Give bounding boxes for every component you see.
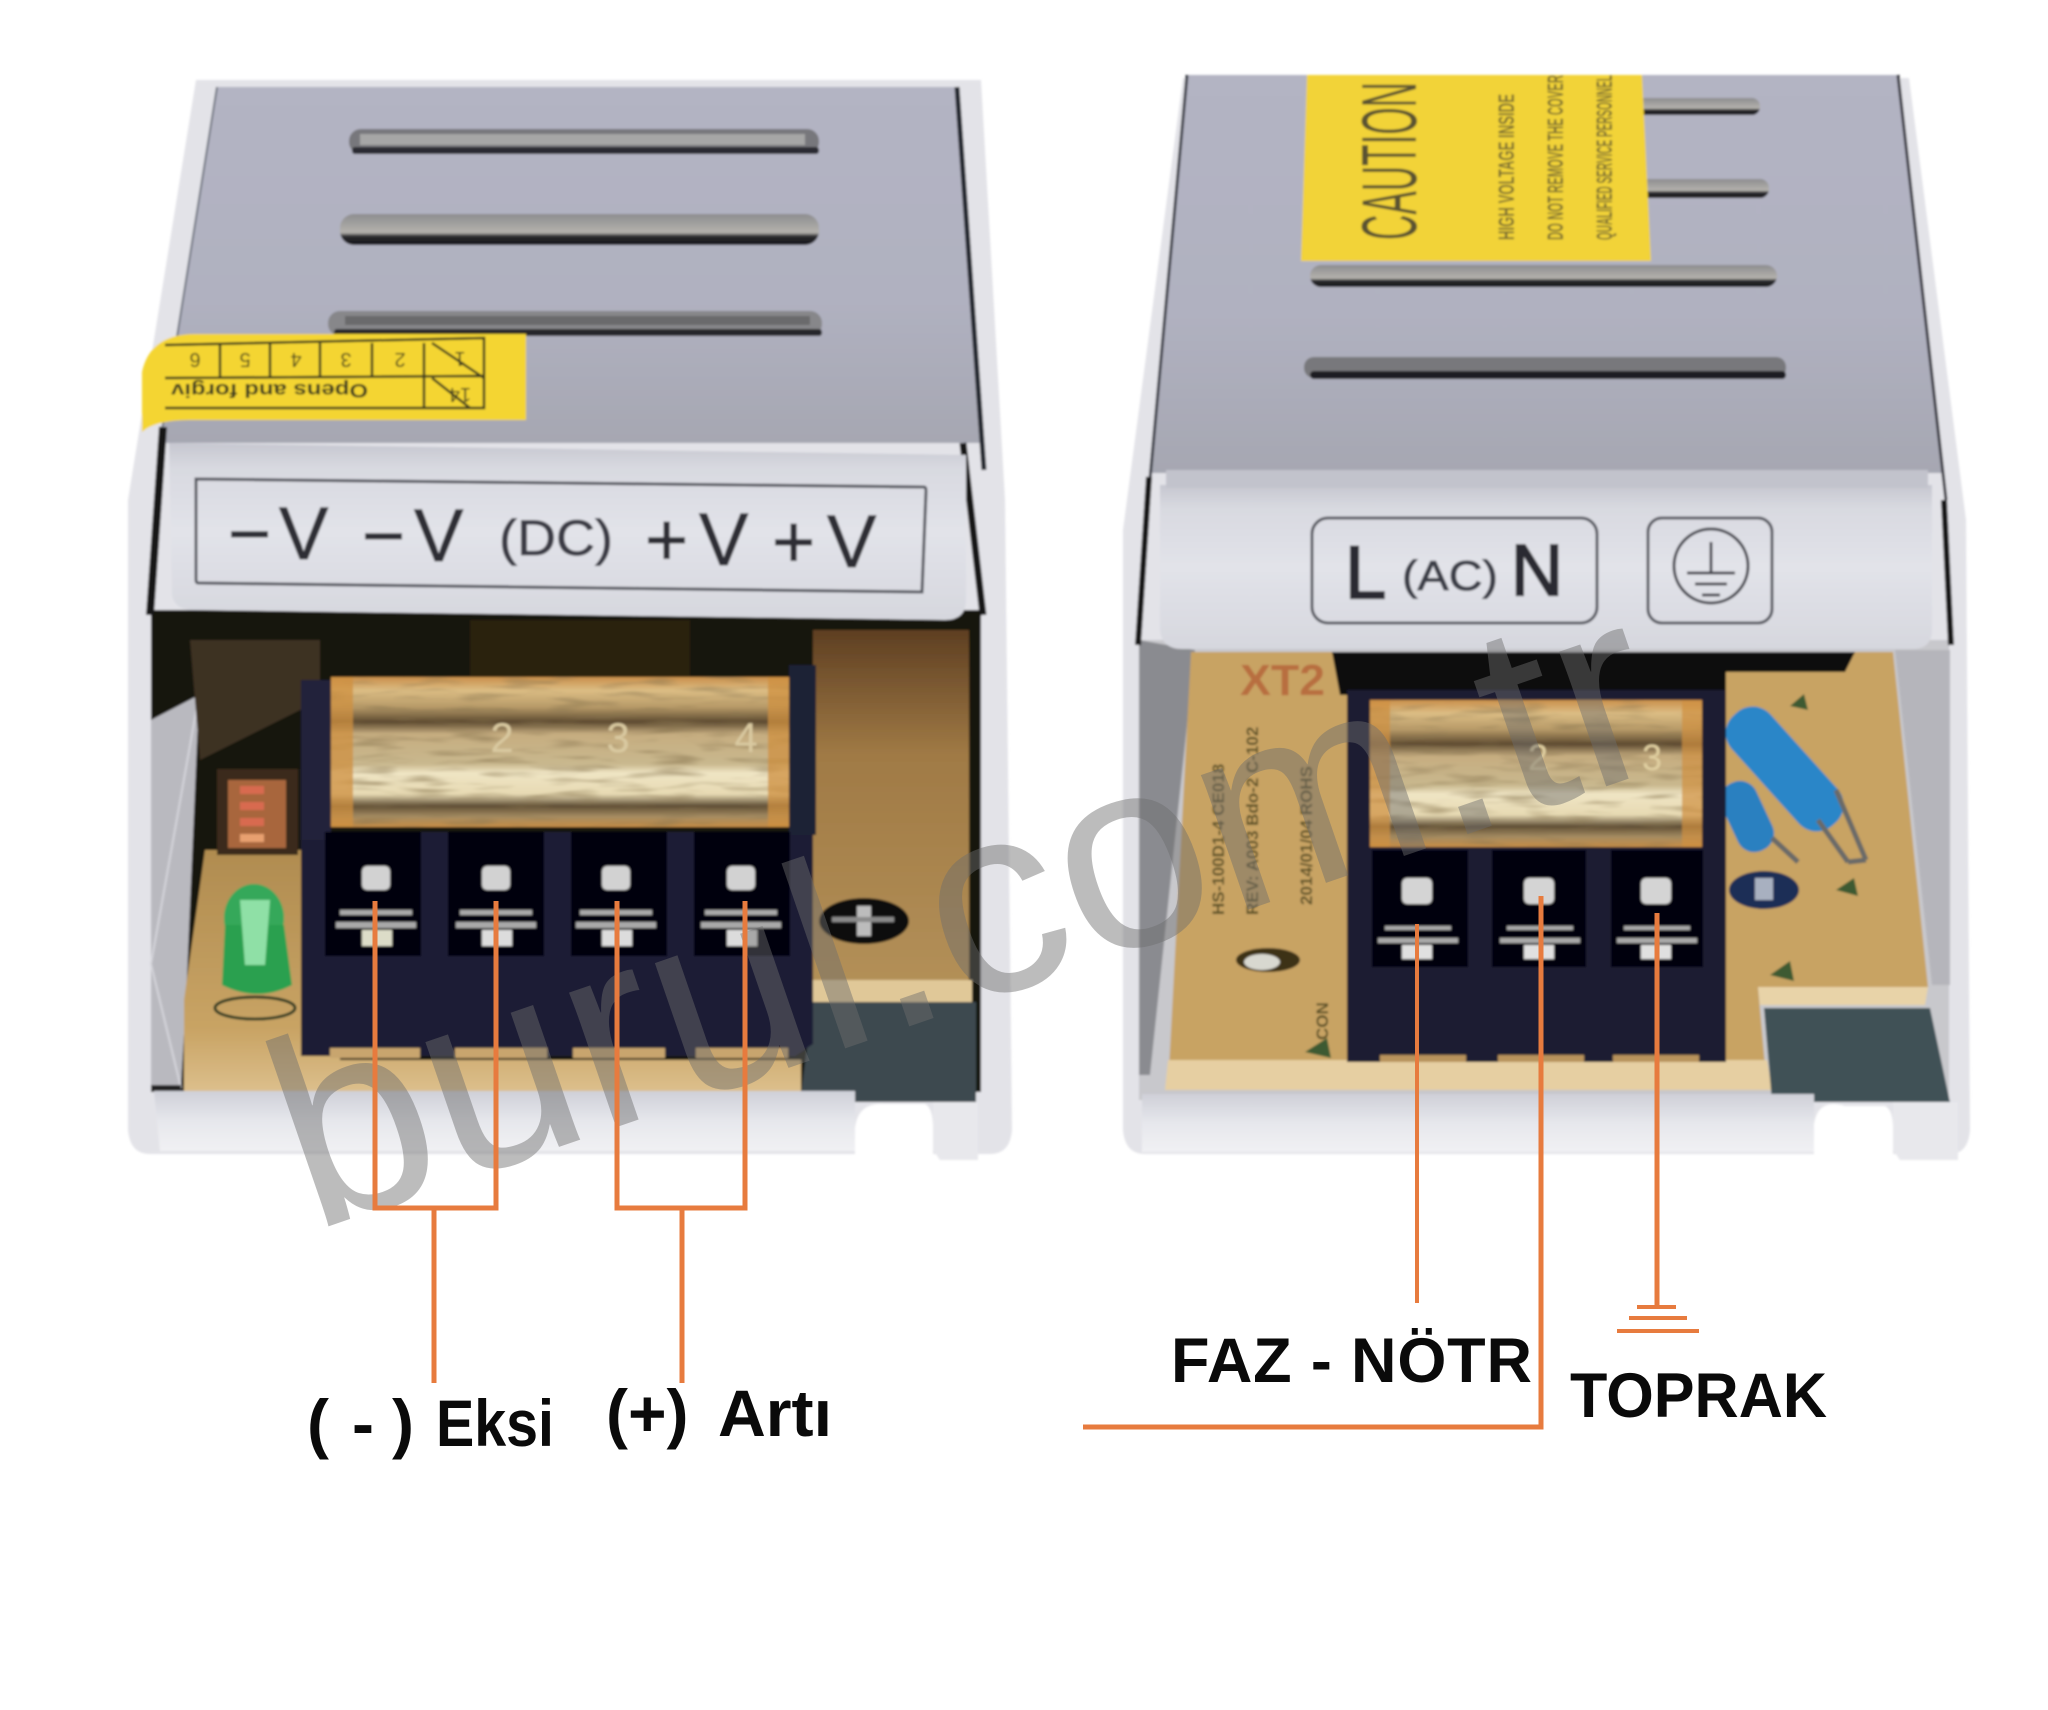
wiring: DC negative bracket: [375, 901, 496, 1383]
front label plate: V: [279, 492, 329, 575]
front label plate: −: [362, 494, 405, 577]
front label plate: V: [699, 498, 749, 581]
yellow warranty label: 5: [239, 348, 251, 370]
yellow warranty label: Opens and forgiv: [170, 379, 368, 400]
board print: 2014/01/04 ROHS: [1297, 766, 1316, 905]
board silkscreen triangles: [1305, 694, 1858, 1058]
board print: HS-100D1-4 CE018: [1209, 764, 1228, 915]
label: positive: Artı: [718, 1376, 832, 1450]
transparent terminal cover: 3: [1642, 737, 1662, 778]
yellow warranty label: 2: [394, 348, 406, 370]
label: phase and neutral: FAZ - NÖTR: [1171, 1326, 1532, 1396]
indicator header: [217, 769, 298, 855]
label: positive: [606, 1376, 832, 1450]
yellow warranty label: 4: [290, 348, 302, 370]
front label plate: (DC): [499, 510, 613, 566]
chassis screw: [1729, 871, 1799, 909]
circuit board: [184, 850, 801, 1091]
panel: DC power supply photo (left): [128, 80, 1012, 1165]
label: negative: Eksi: [436, 1386, 554, 1460]
screws: [362, 866, 755, 890]
label: earth: TOPRAK: [1570, 1361, 1827, 1431]
circuit board: [1168, 652, 1928, 1088]
board mounting hole: [1236, 948, 1300, 972]
yellow warranty label: 14: [449, 383, 471, 405]
board print: CON: [1313, 1002, 1332, 1040]
bottom lip of casing: [1142, 1094, 1958, 1165]
front label plate: −: [228, 492, 271, 575]
label: positive: (+): [606, 1376, 688, 1450]
board print: [1209, 727, 1332, 1040]
label: negative: ): [392, 1386, 414, 1460]
wiring: DC positive bracket: [617, 901, 745, 1383]
front label plate: V: [414, 494, 464, 577]
earth symbol box: [1648, 518, 1772, 623]
L / AC / N label box: [1312, 518, 1597, 623]
blue capacitors: [1714, 697, 1866, 862]
yellow caution label: [1301, 75, 1651, 261]
yellow warranty label: [142, 334, 526, 432]
green LED: [215, 884, 295, 1019]
transparent terminal cover: 2: [1528, 737, 1548, 778]
side wall inside: [151, 695, 199, 1085]
label: negative: (: [307, 1386, 329, 1460]
bottom lip of casing: [154, 1091, 978, 1165]
wiring: neutral line: [1083, 896, 1541, 1427]
L / AC / N label box: N: [1511, 531, 1563, 611]
panel: AC power supply photo (right): [1123, 75, 1970, 1165]
outer metal casing: [1123, 78, 1970, 1154]
L / AC / N label box: (AC): [1402, 552, 1498, 599]
interior cavity: [151, 610, 981, 1092]
transparent terminal cover: [1370, 700, 1702, 847]
front label plate: V: [827, 500, 877, 583]
wiring: phase line: [1415, 924, 1419, 1303]
front label plate: [150, 427, 983, 620]
front label plate: +: [645, 498, 688, 581]
board print: REV: A003 Bdo-2 C-102: [1243, 727, 1262, 915]
outer metal casing: [128, 80, 1012, 1154]
yellow warranty label: 1: [454, 347, 466, 369]
front label plate: [1138, 470, 1951, 649]
yellow caution label: HIGH VOLTAGE INSIDE: [1494, 94, 1519, 240]
terminal block: 3 positions: [1347, 690, 1726, 1062]
L / AC / N label box: L: [1345, 531, 1386, 614]
interior cavity: [1139, 640, 1949, 1100]
terminal block: 4 positions: [301, 665, 816, 1058]
label: negative: [307, 1386, 554, 1460]
top plate with vent slots: [160, 87, 984, 470]
transparent terminal cover: 2: [490, 714, 514, 761]
transparent terminal cover: 4: [734, 714, 758, 761]
chassis screw: [819, 898, 909, 944]
label: negative: -: [352, 1386, 374, 1460]
red board marking: XT2: [1240, 656, 1325, 705]
wiring: earth line with ground symbol: [1617, 913, 1699, 1331]
front label plate: +: [772, 500, 815, 583]
watermark: burul.com.tr: [233, 533, 1692, 1287]
yellow warranty label: 6: [189, 348, 201, 370]
transparent terminal cover: [331, 677, 789, 827]
yellow warranty label: 3: [340, 348, 352, 370]
transparent terminal cover: 3: [606, 714, 630, 761]
top plate with vent slots: [1149, 75, 1946, 500]
